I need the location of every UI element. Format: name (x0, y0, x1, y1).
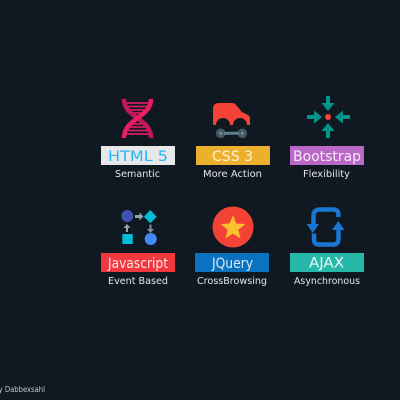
item: HTML 5 (101, 99, 175, 180)
caption: More Action: More Action (203, 169, 262, 180)
label: CSS 3: CSS 3 (212, 149, 253, 165)
item: Bootstrap (290, 96, 364, 180)
icon: star in red circle (212, 206, 254, 248)
caption: Semantic: Semantic (115, 169, 160, 180)
caption: Flexibility: Flexibility (303, 169, 350, 180)
label: Bootstrap: Bootstrap (293, 149, 361, 165)
icon: flow diagram (121, 210, 157, 245)
label: AJAX: AJAX (309, 256, 344, 272)
caption: Asynchronous: Asynchronous (294, 276, 360, 287)
item: Javascript (101, 210, 175, 287)
caption: CrossBrowsing: CrossBrowsing (197, 276, 267, 287)
item: JQuery (195, 206, 269, 287)
label: JQuery: JQuery (211, 256, 253, 272)
icon: car on track (213, 103, 250, 138)
label: Javascript: Javascript (107, 256, 168, 272)
icon: DNA helix (124, 99, 151, 138)
item: AJAX (290, 210, 364, 287)
label: HTML 5: HTML 5 (108, 149, 168, 165)
caption: Event Based: Event Based (108, 276, 168, 287)
icon: cycle arrows (307, 210, 344, 244)
icon: four arrows pointing inward (307, 96, 350, 138)
item: CSS 3 (196, 103, 270, 180)
